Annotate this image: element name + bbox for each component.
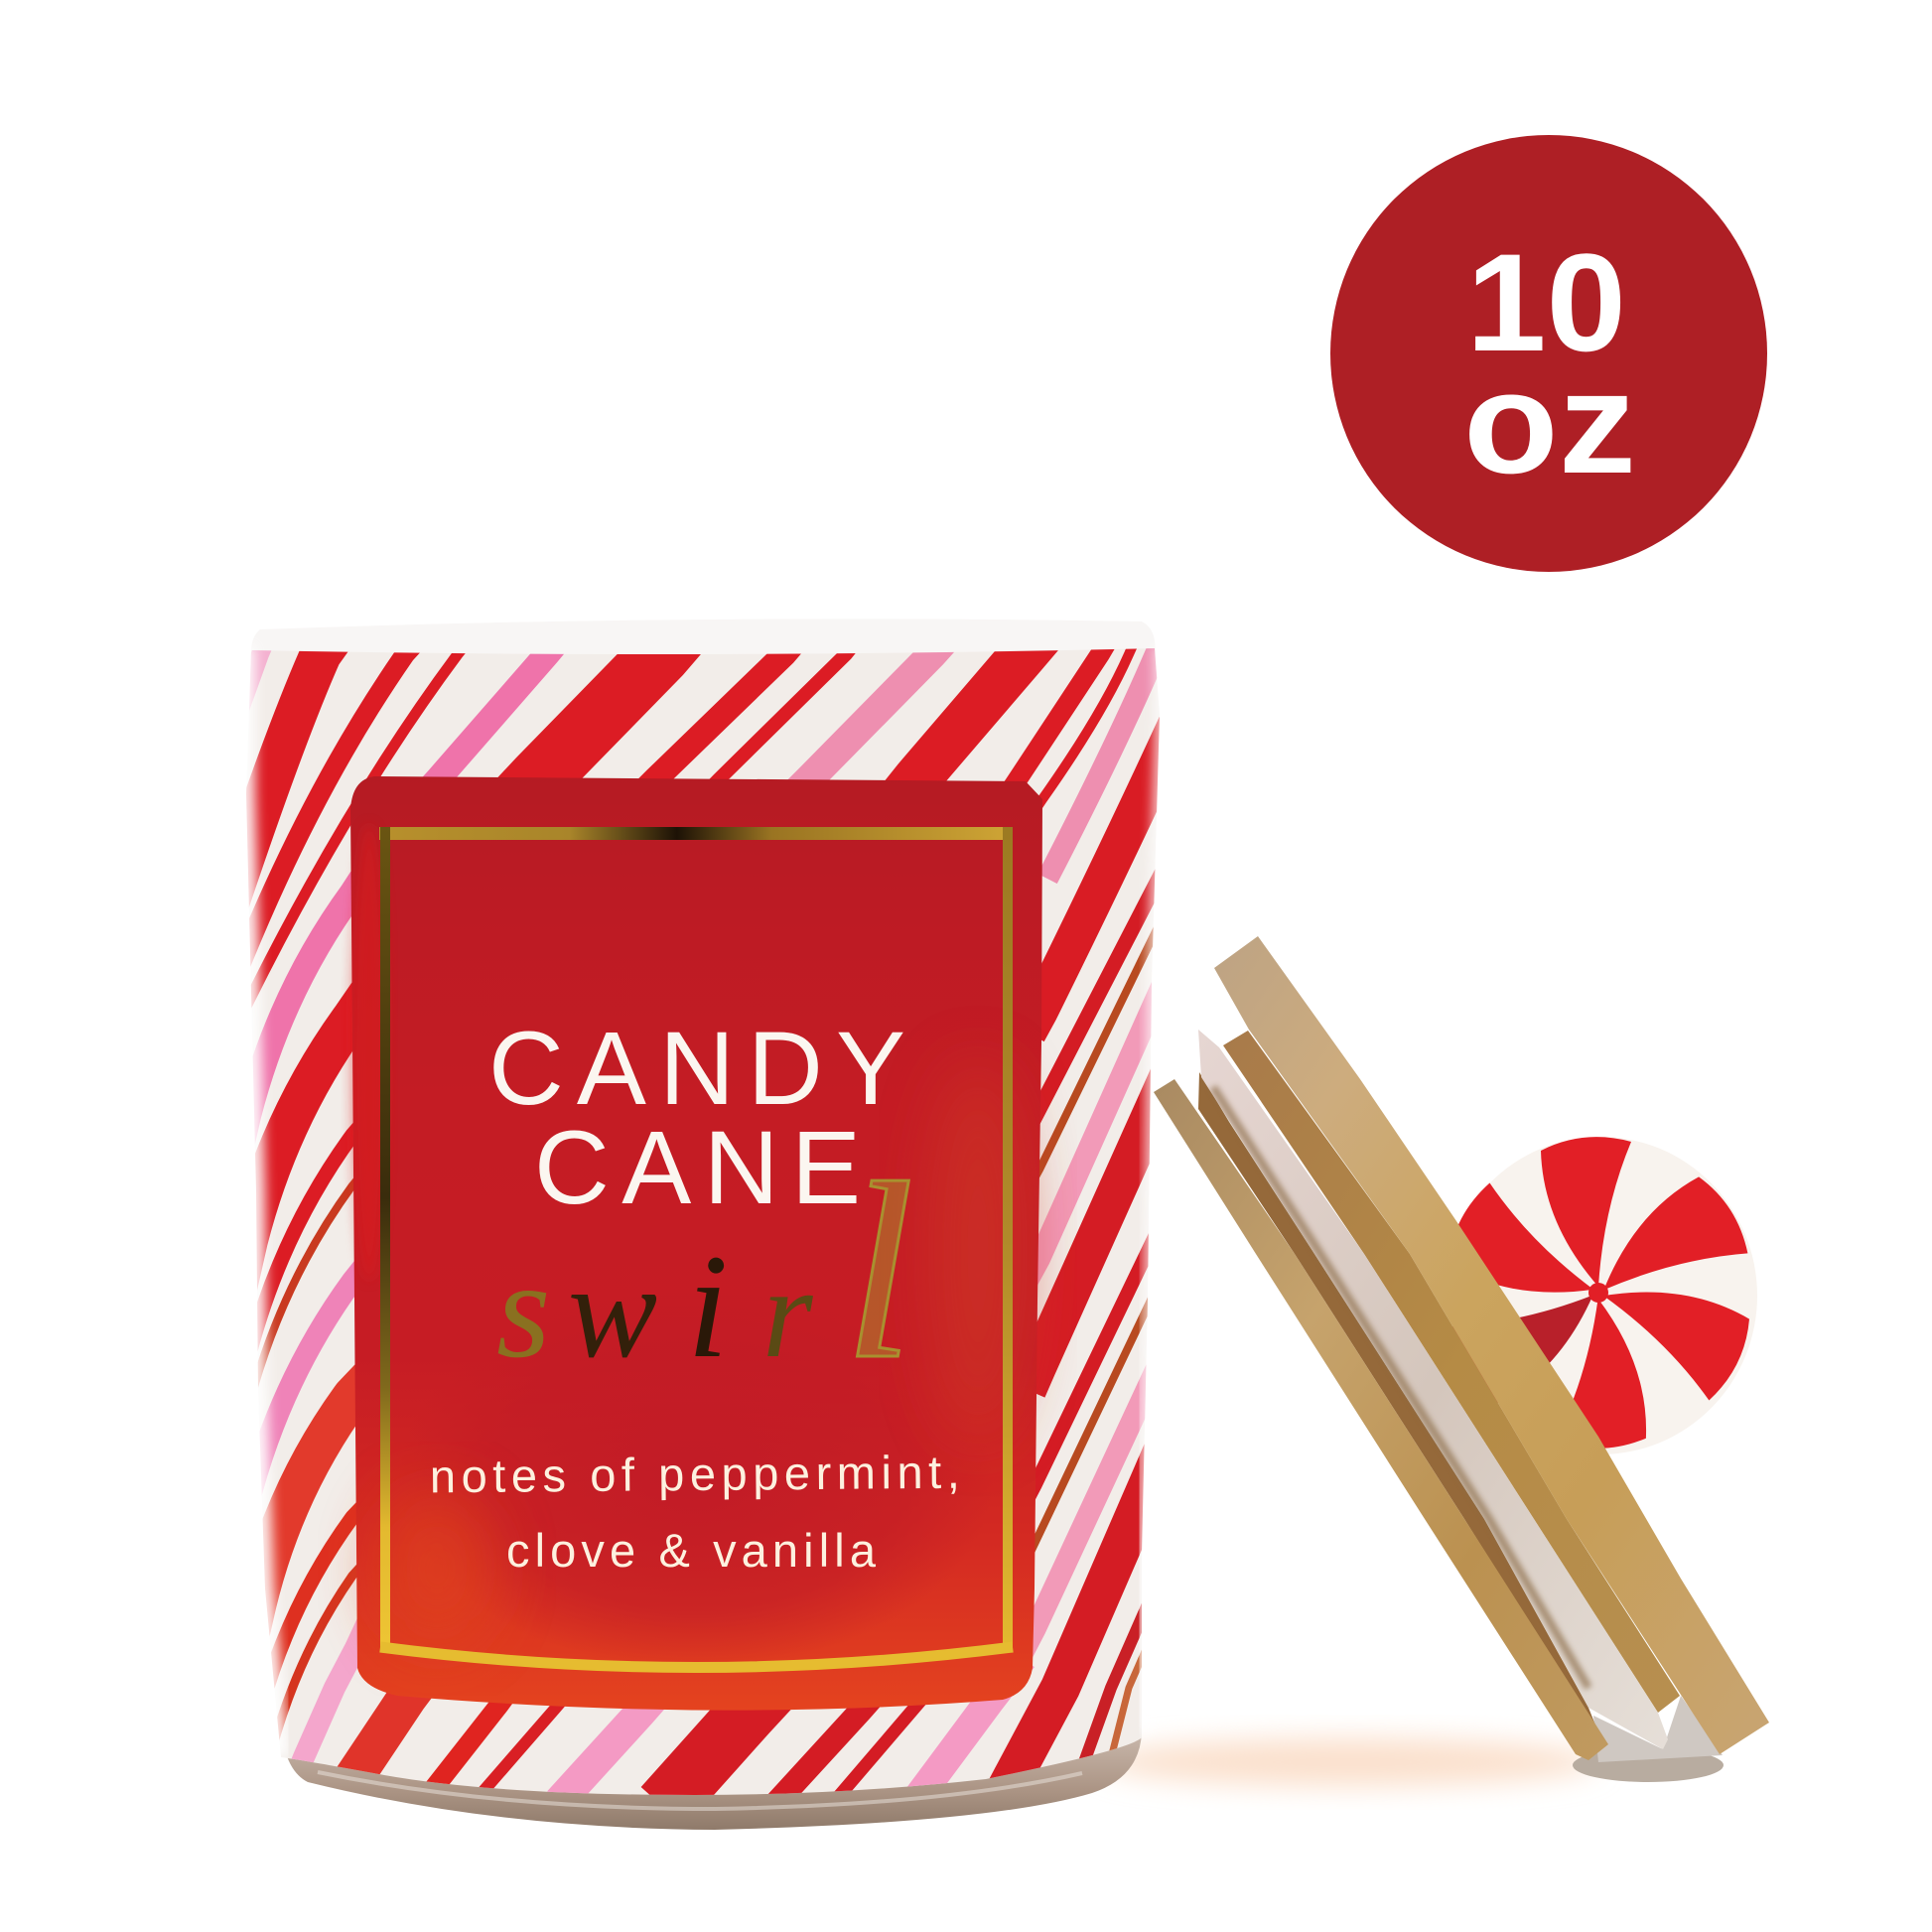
soft focus at left jar edge	[244, 645, 278, 1757]
top band pink stripes	[249, 648, 1158, 1144]
lid silicone liner	[1198, 1030, 1668, 1749]
label left highlight	[351, 824, 387, 1281]
striped wrap	[223, 596, 1176, 1815]
scent notes line 1: notes of peppermint,	[430, 1446, 960, 1502]
product name line 2: CANE	[534, 1110, 861, 1226]
badge unit: oz	[1463, 342, 1636, 503]
candy blades	[1437, 1137, 1761, 1451]
candle jar	[223, 596, 1176, 1830]
badge: 10 oz	[1330, 135, 1767, 572]
gold script word: r	[762, 1242, 813, 1385]
peppermint candy	[1437, 1137, 1761, 1454]
label panel	[350, 776, 1042, 1711]
candy disc	[1444, 1137, 1757, 1454]
glass base highlight	[318, 1772, 1082, 1809]
frame top	[379, 827, 1013, 840]
glass base	[282, 1732, 1142, 1830]
liner shadow	[1213, 1087, 1588, 1688]
gold script word: s	[496, 1233, 550, 1387]
glass rim at top	[251, 619, 1155, 655]
gold script word: w	[568, 1238, 657, 1386]
product name line 1: CANDY	[488, 1011, 905, 1127]
lid floor contact shadow	[1573, 1748, 1724, 1782]
lid dark inner wood	[1198, 1072, 1598, 1732]
lid top board	[1214, 936, 1769, 1754]
floor shadow	[1102, 1738, 1598, 1786]
scent notes line 2: clove & vanilla	[506, 1524, 877, 1577]
gold frame	[379, 827, 1013, 1668]
gold script word: l	[844, 1132, 914, 1412]
label lower left orange	[377, 1489, 496, 1648]
frame right	[1003, 827, 1013, 1651]
badge circle	[1330, 135, 1767, 572]
gold script word: i	[687, 1224, 729, 1389]
wooden lid with peppermint knob	[1154, 936, 1769, 1782]
lid middle board	[1223, 1031, 1680, 1713]
soft focus at right jar edge	[1145, 645, 1163, 1732]
lid gap shadow	[1593, 1696, 1723, 1762]
front label	[350, 776, 1042, 1711]
left side stripes	[255, 983, 357, 1763]
label right tone	[928, 1062, 1028, 1440]
badge number: 10	[1466, 224, 1626, 380]
frame bottom	[380, 1647, 1013, 1668]
bottom band stripes	[338, 1444, 1145, 1795]
lid lower board	[1154, 1079, 1608, 1760]
label lower tone	[397, 1291, 993, 1668]
right side stripes	[1033, 717, 1160, 1658]
wrap paper	[238, 635, 1172, 1807]
top band red stripes	[246, 648, 1137, 1008]
frame left	[380, 827, 390, 1651]
